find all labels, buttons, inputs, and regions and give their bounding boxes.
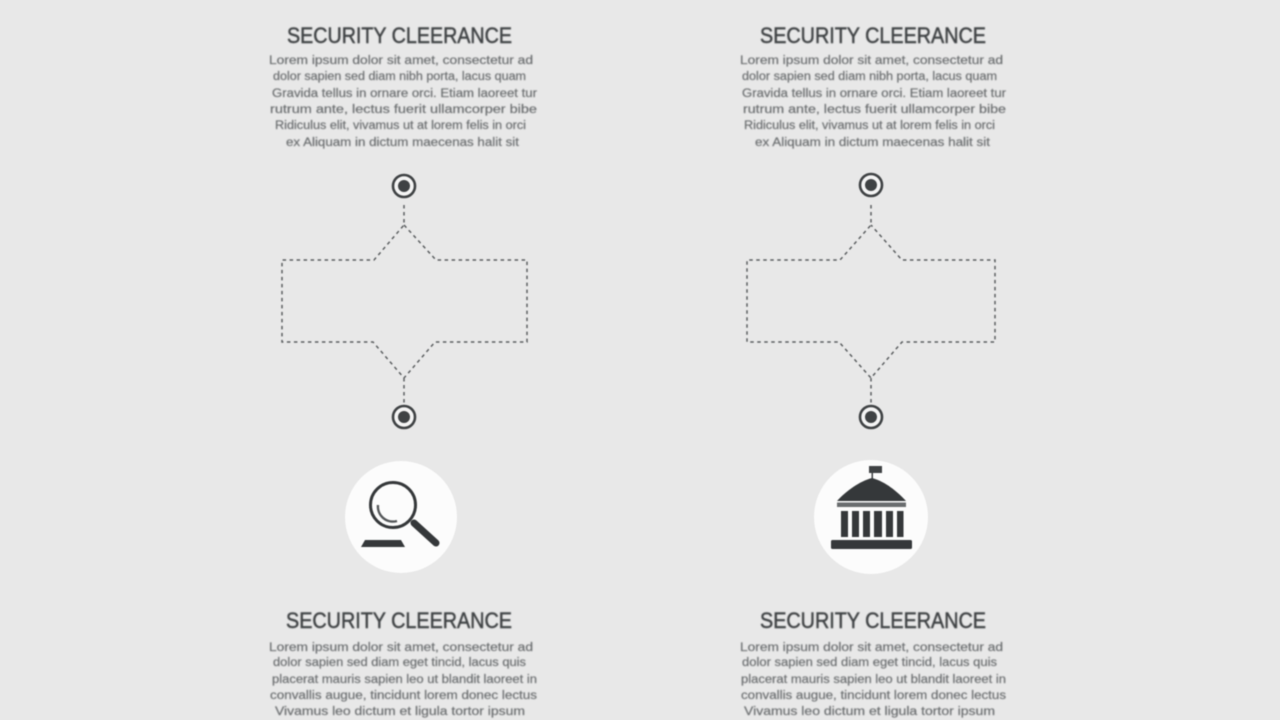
body text: bottom left: convallis augue, tincidunt lorem donec lectus	[270, 690, 537, 702]
node: left top	[393, 175, 415, 197]
body text: top right: Gravida tellus in ornare orci. Etiam laoreet tur	[742, 88, 1006, 100]
heading: bottom left: SECURITY CLEERANCE	[286, 608, 512, 633]
body text: bottom right: convallis augue, tincidunt lorem donec lectus	[741, 690, 1006, 702]
icon: magnifying glass	[345, 461, 457, 573]
body text: bottom right	[740, 642, 1006, 718]
panel: bottom left text block	[269, 608, 537, 718]
panel: top right text block	[740, 23, 1006, 149]
icon: government building	[814, 460, 928, 574]
node: right top	[860, 174, 882, 196]
dashed outline: left	[282, 205, 527, 405]
body text: bottom right: Vivamus leo dictum et ligula tortor ipsum	[744, 706, 995, 718]
diagram: right dashed connector	[747, 174, 995, 428]
body text: top left: Lorem ipsum dolor sit amet, consectetur ad	[269, 55, 533, 67]
body text: top left: rutrum ante, lectus fuerit ullamcorper bibe	[270, 104, 537, 116]
node: left bottom	[393, 406, 415, 428]
body text: top right: Ridiculus elit, vivamus ut at lorem felis in orci	[744, 120, 995, 132]
node: right bottom	[860, 406, 882, 428]
body text: bottom left: dolor sapien sed diam eget tincid, lacus quis	[273, 657, 526, 669]
body text: top left	[269, 55, 537, 149]
body text: top right: ex Aliquam in dictum maecenas halit sit	[755, 137, 991, 149]
dashed outline: right	[747, 205, 995, 405]
heading: bottom right: SECURITY CLEERANCE	[760, 608, 986, 633]
body text: top left: Ridiculus elit, vivamus ut at lorem felis in orci	[275, 120, 526, 132]
panel: bottom right text block	[740, 608, 1006, 718]
body text: bottom left: Lorem ipsum dolor sit amet, consectetur ad	[269, 642, 533, 654]
body text: top right: Lorem ipsum dolor sit amet, consectetur ad	[740, 55, 1003, 67]
body text: bottom right: placerat mauris sapien leo ut blandit laoreet in	[741, 674, 1006, 686]
body text: bottom right: Lorem ipsum dolor sit amet, consectetur ad	[740, 642, 1003, 654]
body text: top left: Gravida tellus in ornare orci. Etiam laoreet tur	[272, 88, 537, 100]
panel: top left text block	[269, 23, 537, 149]
body text: bottom left: placerat mauris sapien leo ut blandit laoreet in	[272, 674, 537, 686]
body text: top left: ex Aliquam in dictum maecenas halit sit	[286, 137, 520, 149]
body text: top right: dolor sapien sed diam nibh porta, lacus quam	[742, 71, 997, 83]
heading: top right: SECURITY CLEERANCE	[760, 23, 986, 48]
body text: top right: rutrum ante, lectus fuerit ullamcorper bibe	[743, 104, 1006, 116]
body text: bottom left	[269, 642, 537, 718]
body text: bottom right: dolor sapien sed diam eget tincid, lacus quis	[742, 657, 997, 669]
body text: top left: dolor sapien sed diam nibh porta, lacus quam	[273, 71, 526, 83]
body text: top right	[740, 55, 1006, 149]
body text: bottom left: Vivamus leo dictum et ligula tortor ipsum	[275, 706, 525, 718]
heading: top left: SECURITY CLEERANCE	[287, 23, 512, 48]
diagram: left dashed connector	[282, 175, 527, 428]
